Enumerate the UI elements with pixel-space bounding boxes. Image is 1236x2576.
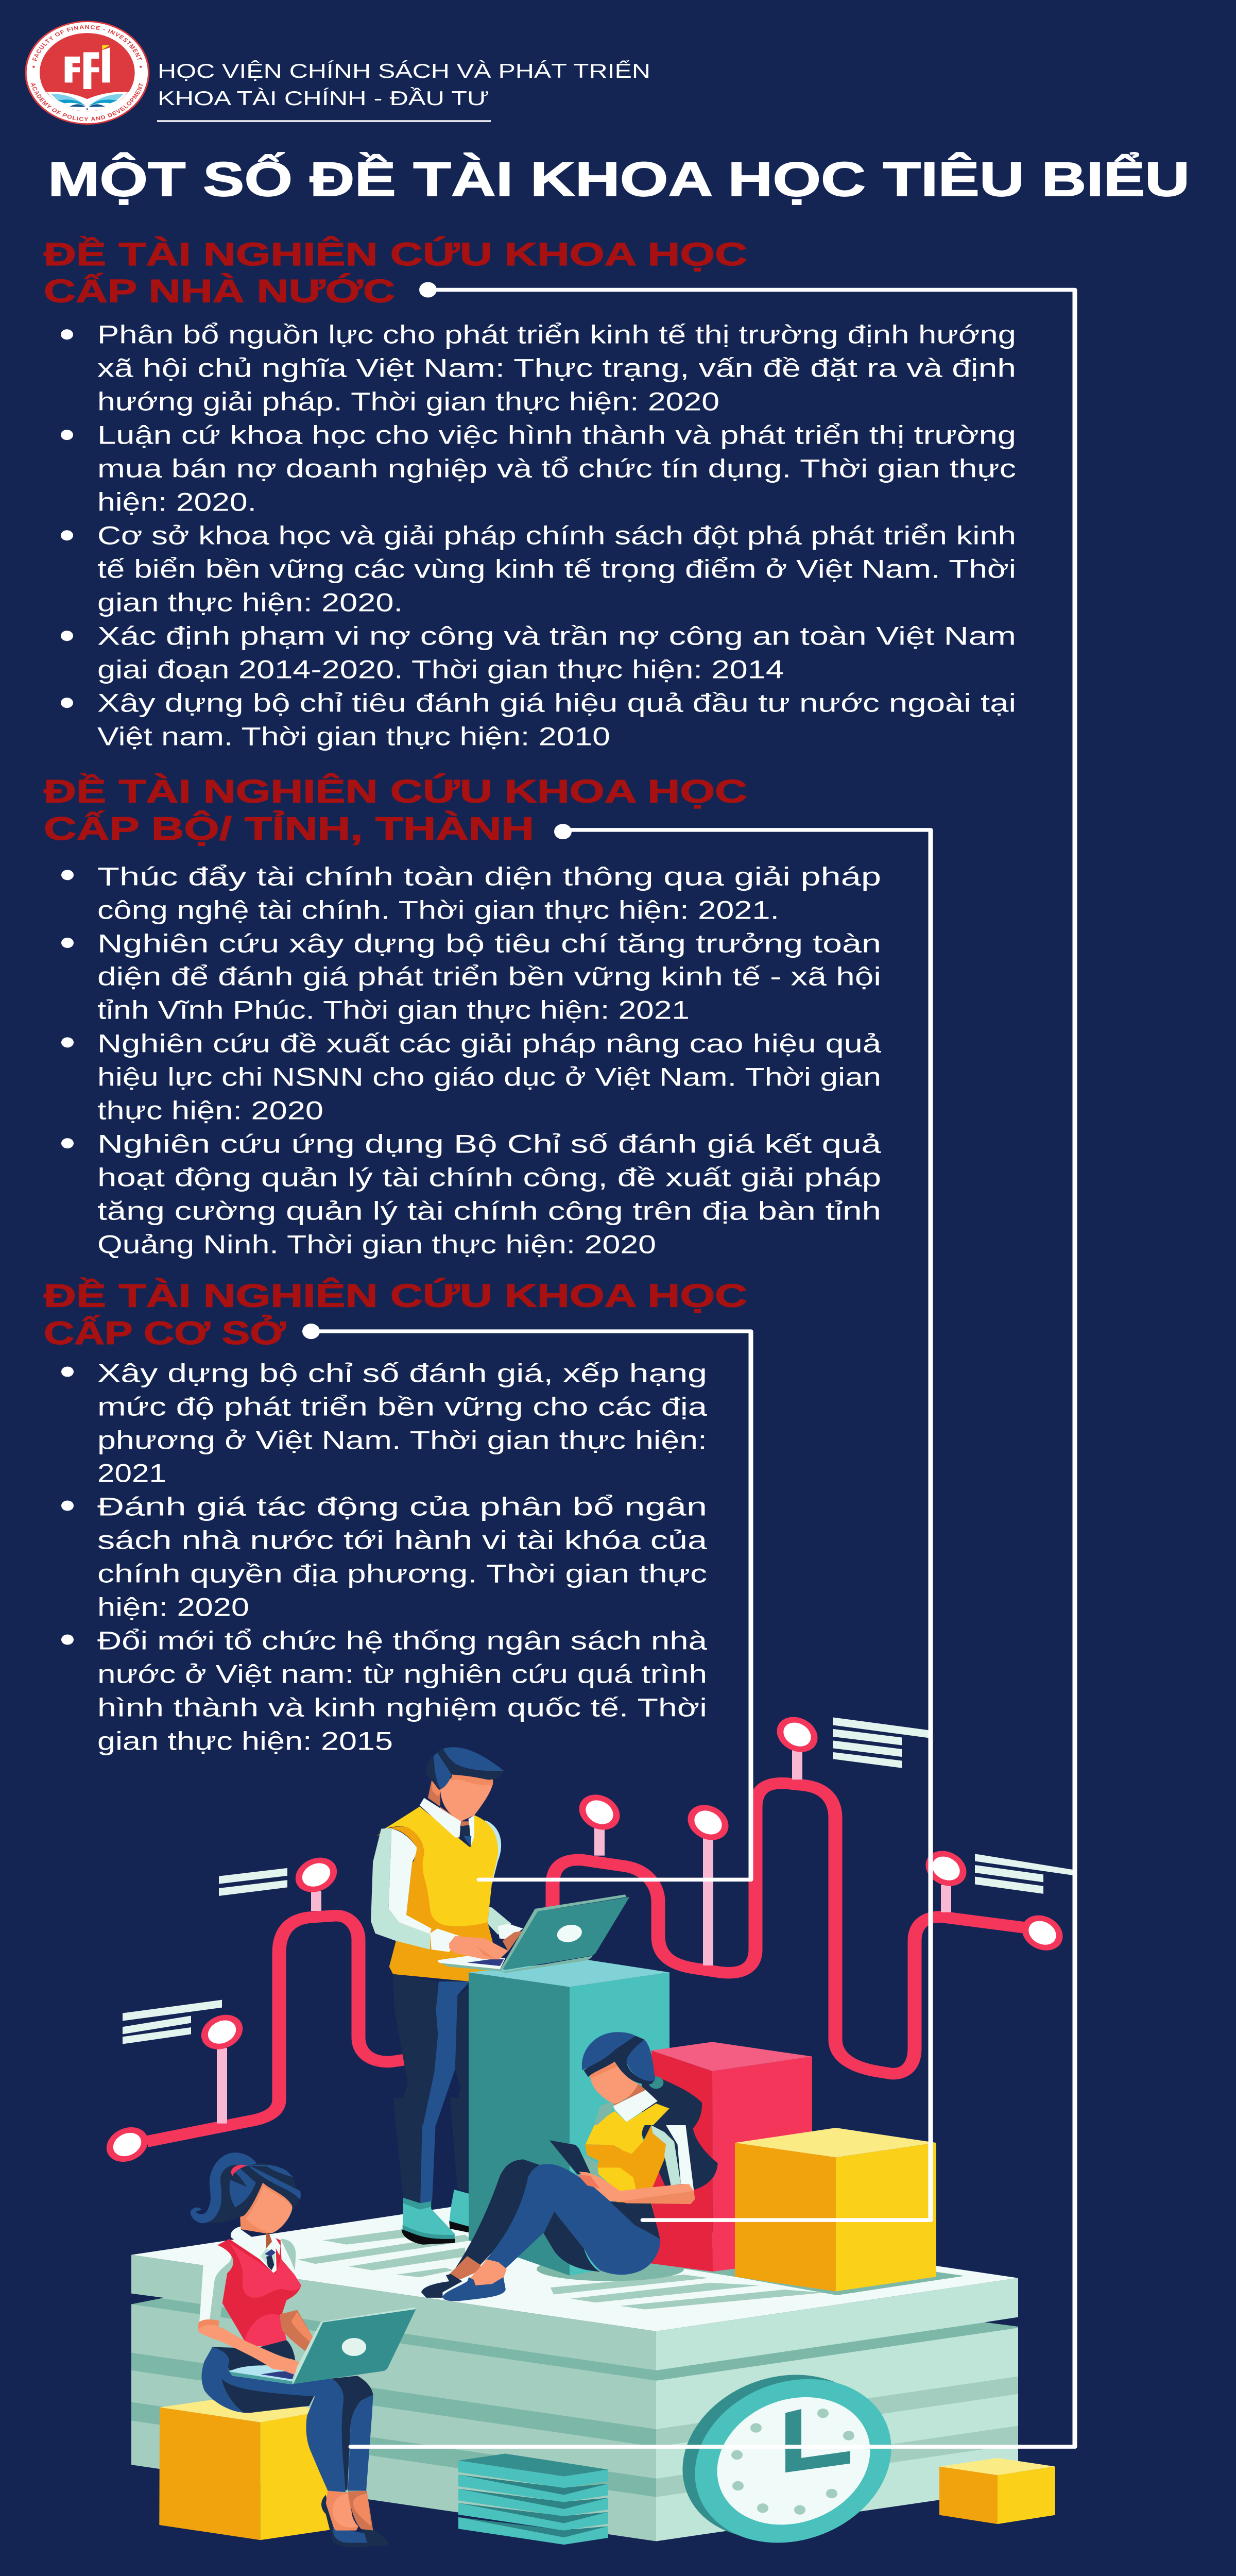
connector line: national level (351, 282, 1075, 2447)
connector line: ministry and provincial level (554, 824, 931, 2220)
bullet list: ministry and provincial level: Nghiên cứu đề xuất các giải pháp nâng cao hiệu quả (97, 1029, 881, 1058)
bullet list: national level: Việt nam. Thời gian thực hiện: 2010 (97, 722, 610, 751)
icon: FFI logo (25, 21, 149, 125)
organisation name: HỌC VIỆN CHÍNH SÁCH VÀ PHÁT TRIỂN (158, 60, 650, 82)
bullet list: national level: tế biển bền vững các vùng kinh tế trọng điểm ở Việt Nam. Thời (97, 554, 1016, 584)
bullet list: ministry and provincial level: diện để đánh giá phát triển bền vững kinh tế - xã hội (97, 962, 881, 991)
illustration: team working on a stack of documents (98, 1710, 1073, 2576)
bullet list: national level: hướng giải pháp. Thời gian thực hiện: 2020 (97, 387, 719, 416)
heading: institute level: CẤP CƠ SỞ (44, 1314, 286, 1351)
bullet list: institute level (61, 1359, 707, 1756)
heading: institute level: ĐỀ TÀI NGHIÊN CỨU KHOA HỌC (44, 1277, 747, 1314)
teal paper pile (458, 2453, 608, 2545)
yellow seat box (159, 2398, 330, 2540)
bullet list: institute level: chính quyền địa phương. Thời gian thực (97, 1559, 707, 1588)
bullet list: institute level: phương ở Việt Nam. Thời gian thực hiện: (97, 1426, 707, 1454)
icon: FFI logo: FACULTY OF FINANCE - INVESTMENT (32, 25, 142, 61)
bullet list: ministry and provincial level: Nghiên cứu xây dựng bộ tiêu chí tăng trưởng toàn (97, 929, 881, 958)
teal column (469, 1960, 670, 2276)
bullet list: ministry and provincial level: Nghiên cứu ứng dụng Bộ Chỉ số đánh giá kết quả (97, 1129, 881, 1158)
woman: long hair behind (642, 2071, 718, 2190)
large yellow box (735, 2128, 936, 2292)
heading: institute level (44, 1277, 747, 1351)
bullet list: ministry and provincial level: Thúc đẩy tài chính toàn diện thông qua giải pháp (97, 862, 881, 891)
man's laptop and hands (438, 1894, 629, 1973)
organisation name (157, 60, 650, 122)
section 1: national-level topics (44, 235, 1075, 2447)
man: upper body and head (371, 1747, 523, 2125)
bullet list: institute level: 2021 (97, 1459, 166, 1488)
bullet list: national level: Luận cứ khoa học cho việc hình thành và phát triển thị trường (97, 420, 1016, 450)
red box (651, 2042, 812, 2272)
red timeline path (147, 1783, 1025, 2142)
bullet list: national level: xã hội chủ nghĩa Việt Nam: Thực trạng, vấn đề đặt ra và định (97, 353, 1016, 383)
pin markers (98, 1710, 1071, 2169)
bullet list: ministry and provincial level: hoạt động quản lý tài chính công, đề xuất giải pháp (97, 1163, 881, 1192)
bullet list: national level: gian thực hiện: 2020. (97, 588, 403, 617)
bullet list: institute level: nước ở Việt nam: từ nghiên cứu quá trình (97, 1659, 707, 1689)
heading: ministry and provincial level: ĐỀ TÀI NGHIÊN CỨU KHOA HỌC (44, 773, 747, 809)
heading: ministry and provincial level: CẤP BỘ/ TỈNH, THÀNH (44, 810, 534, 847)
bullet list: national level: Xây dựng bộ chỉ tiêu đánh giá hiệu quả đầu tư nước ngoài tại (97, 688, 1016, 718)
bullet list: national level: Cơ sở khoa học và giải pháp chính sách đột phá phát triển kinh (97, 521, 1016, 550)
bullet list: institute level: Xây dựng bộ chỉ số đánh giá, xếp hạng (97, 1359, 707, 1387)
bullet list: institute level: Đánh giá tác động của phân bổ ngân (97, 1492, 707, 1521)
standing man (371, 1747, 523, 2245)
paper stack base (131, 2200, 1018, 2541)
bullet list: ministry and provincial level: hiệu lực chi NSNN cho giáo dục ở Việt Nam. Thời gian (97, 1062, 881, 1091)
connector line: institute level (302, 1324, 751, 1879)
heading: national level: CẤP NHÀ NƯỚC (44, 273, 395, 309)
bullet list: institute level: gian thực hiện: 2015 (97, 1726, 393, 1756)
bullet list: national level: Xác định phạm vi nợ công và trần nợ công an toàn Việt Nam (97, 621, 1016, 651)
header: logo and organisation name (25, 21, 650, 125)
bullet list: ministry and provincial level: tỉnh Vĩnh Phúc. Thời gian thực hiện: 2021 (97, 995, 690, 1024)
bullet list: national level: giai đoạn 2014-2020. Thời gian thực hiện: 2014 (97, 655, 784, 684)
heading: national level: ĐỀ TÀI NGHIÊN CỨU KHOA HỌC (44, 235, 747, 273)
section 3: institute-level topics (44, 1277, 751, 1879)
woman with laptop (191, 2153, 416, 2547)
bullet list: institute level: mức độ phát triển bền vững cho các địa (97, 1392, 707, 1421)
bullet list: institute level: Đổi mới tổ chức hệ thống ngân sách nhà (97, 1626, 707, 1655)
section 2: ministry and provincial topics (44, 773, 931, 2220)
organisation name: KHOA TÀI CHÍNH - ĐẦU TƯ (158, 88, 489, 110)
bullet list: ministry and provincial level (61, 862, 881, 1259)
bullet list: institute level: sách nhà nước tới hành vi tài khóa của (97, 1526, 707, 1555)
seated woman with tablet (421, 2032, 718, 2301)
man: legs and shoes (393, 2098, 469, 2245)
heading: ministry and provincial level (44, 773, 747, 847)
small yellow box (939, 2458, 1055, 2524)
bullet list: national level: Phân bổ nguồn lực cho phát triển kinh tế thị trường định hướng (97, 320, 1016, 349)
woman: torso, legs, tablet (421, 2125, 695, 2301)
icon: clock (642, 2341, 932, 2576)
woman: head (582, 2032, 670, 2125)
bullet list: ministry and provincial level: công nghệ tài chính. Thời gian thực hiện: 2021. (97, 895, 779, 924)
bullet list: institute level: hình thành và kinh nghiệm quốc tế. Thời (97, 1693, 707, 1722)
icon: FFI logo: ACADEMY OF POLICY AND DEVELOPMENT (30, 82, 143, 121)
bullet list: national level: hiện: 2020. (97, 487, 256, 517)
bullet list: institute level: hiện: 2020 (97, 1592, 249, 1622)
heading: national level (44, 235, 747, 309)
bullet list: national level (61, 320, 1016, 751)
title: MỘT SỐ ĐỀ TÀI KHOA HỌC TIÊU BIỂU (48, 152, 1190, 206)
pale label lines beside pins (123, 1717, 1073, 2044)
bullet list: ministry and provincial level: tăng cường quản lý tài chính công trên địa bàn tỉnh (97, 1196, 881, 1225)
bullet list: ministry and provincial level: Quảng Ninh. Thời gian thực hiện: 2020 (97, 1230, 656, 1259)
bullet list: national level: mua bán nợ doanh nghiệp và tổ chức tín dụng. Thời gian thực (97, 454, 1016, 483)
bullet list: ministry and provincial level: thực hiện: 2020 (97, 1096, 323, 1125)
